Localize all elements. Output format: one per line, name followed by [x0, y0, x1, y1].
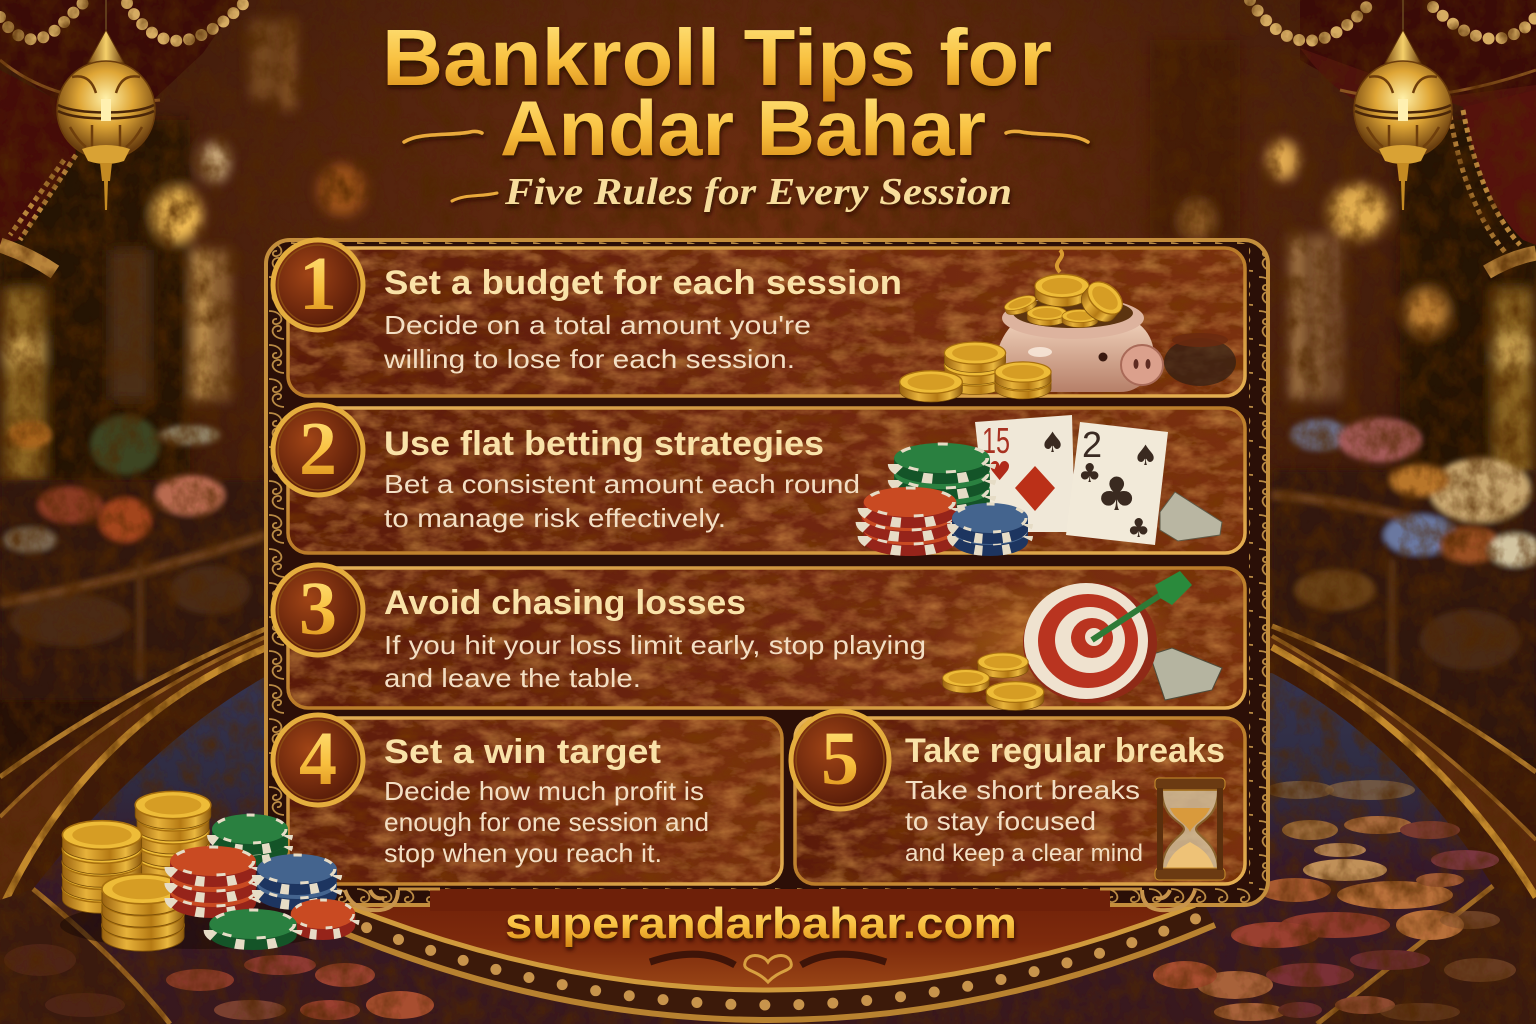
title: Andar Bahar: [500, 84, 986, 172]
badge: number 2: 2: [299, 407, 337, 491]
badge: number 4: 4: [299, 717, 337, 801]
icon: cards and chips: ♠: [1040, 426, 1065, 459]
badge: number 5: [791, 711, 889, 809]
icon: cards and chips: ♣: [1096, 467, 1137, 521]
text: rule 3 description: and leave the table.: [384, 663, 641, 693]
heading: rule 3: Avoid chasing losses: [384, 584, 746, 622]
panel: rules frame: [266, 240, 1268, 911]
badge: number 2: [273, 405, 363, 495]
text: rule 4 description: [384, 776, 709, 868]
icon: cards and chips: ♣: [1127, 514, 1150, 544]
badge: number 5: 5: [821, 717, 859, 801]
title: Bankroll Tips for: [382, 13, 1052, 102]
icon: cards and chips: ♣: [1078, 459, 1101, 489]
cabinets with flowers: [0, 415, 1536, 760]
badge: number 1: 1: [299, 242, 337, 326]
text: rule 3 description: [384, 630, 926, 693]
badge: number 4: [273, 715, 363, 805]
text: rule 3 description: If you hit your loss limit early, stop playing: [384, 630, 926, 660]
icon: cards and chips: [862, 415, 1222, 556]
badge: number 3: 3: [299, 567, 337, 651]
panel: rule 5: [795, 718, 1245, 884]
wood rings of the floor: [0, 626, 1536, 1024]
panel: rule 3: [288, 568, 1245, 710]
icon: left hanging lantern: [57, 0, 155, 210]
heading: rule 1: Set a budget for each session: [384, 264, 902, 302]
icon: target with dart: [935, 571, 1222, 710]
medallion under the panel: [325, 885, 1215, 1020]
website url: superandarbahar.com: [505, 899, 1017, 948]
icon: cards and chips: 2: [1082, 424, 1102, 465]
heading: rule 4: Set a win target: [384, 733, 661, 771]
icon: cards and chips: ♥: [988, 457, 1011, 487]
text: rule 4 description: enough for one session and: [384, 807, 709, 837]
title: [382, 13, 1088, 172]
icon: coins and chips pile: [60, 791, 355, 951]
icon: cards and chips: 15: [982, 420, 1010, 461]
badge: number 1: [273, 240, 363, 330]
icon: right hanging lantern: [1354, 0, 1452, 210]
panel: rule 4: [288, 718, 782, 884]
back wall soft light and columns: [0, 20, 1536, 480]
text: rule 2 description: Bet a consistent amount each round: [384, 469, 860, 499]
subtitle: Five Rules for Every Session: [504, 171, 1012, 213]
text: rule 5 description: to stay focused: [905, 806, 1096, 836]
text: rule 1 description: willing to lose for each session.: [383, 344, 795, 374]
panel: rule 2: [288, 408, 1245, 556]
text: rule 4 description: Decide how much profit is: [384, 776, 704, 806]
text: rule 5 description: Take short breaks: [905, 775, 1140, 805]
badge: number 3: [273, 565, 363, 655]
icon: piggy pot of gold: [900, 250, 1236, 402]
carpet floor: [0, 673, 1536, 1024]
icon: hourglass: [1155, 778, 1225, 880]
text: rule 2 description: [384, 469, 860, 533]
panel: rule 1: [288, 248, 1245, 402]
text: rule 2 description: to manage risk effectively.: [384, 503, 726, 533]
heading: rule 2: Use flat betting strategies: [384, 425, 824, 463]
text: rule 1 description: Decide on a total amount you're: [384, 310, 811, 340]
text: rule 1 description: [383, 310, 811, 374]
text: rule 4 description: stop when you reach it.: [384, 838, 662, 868]
heading: rule 5: Take regular breaks: [905, 732, 1225, 770]
icon: cards and chips: ♠: [1133, 439, 1158, 472]
drapes, garlands and pillars: [0, 0, 1536, 272]
text: rule 5 description: [905, 775, 1143, 867]
text: rule 5 description: and keep a clear mind: [905, 840, 1143, 867]
